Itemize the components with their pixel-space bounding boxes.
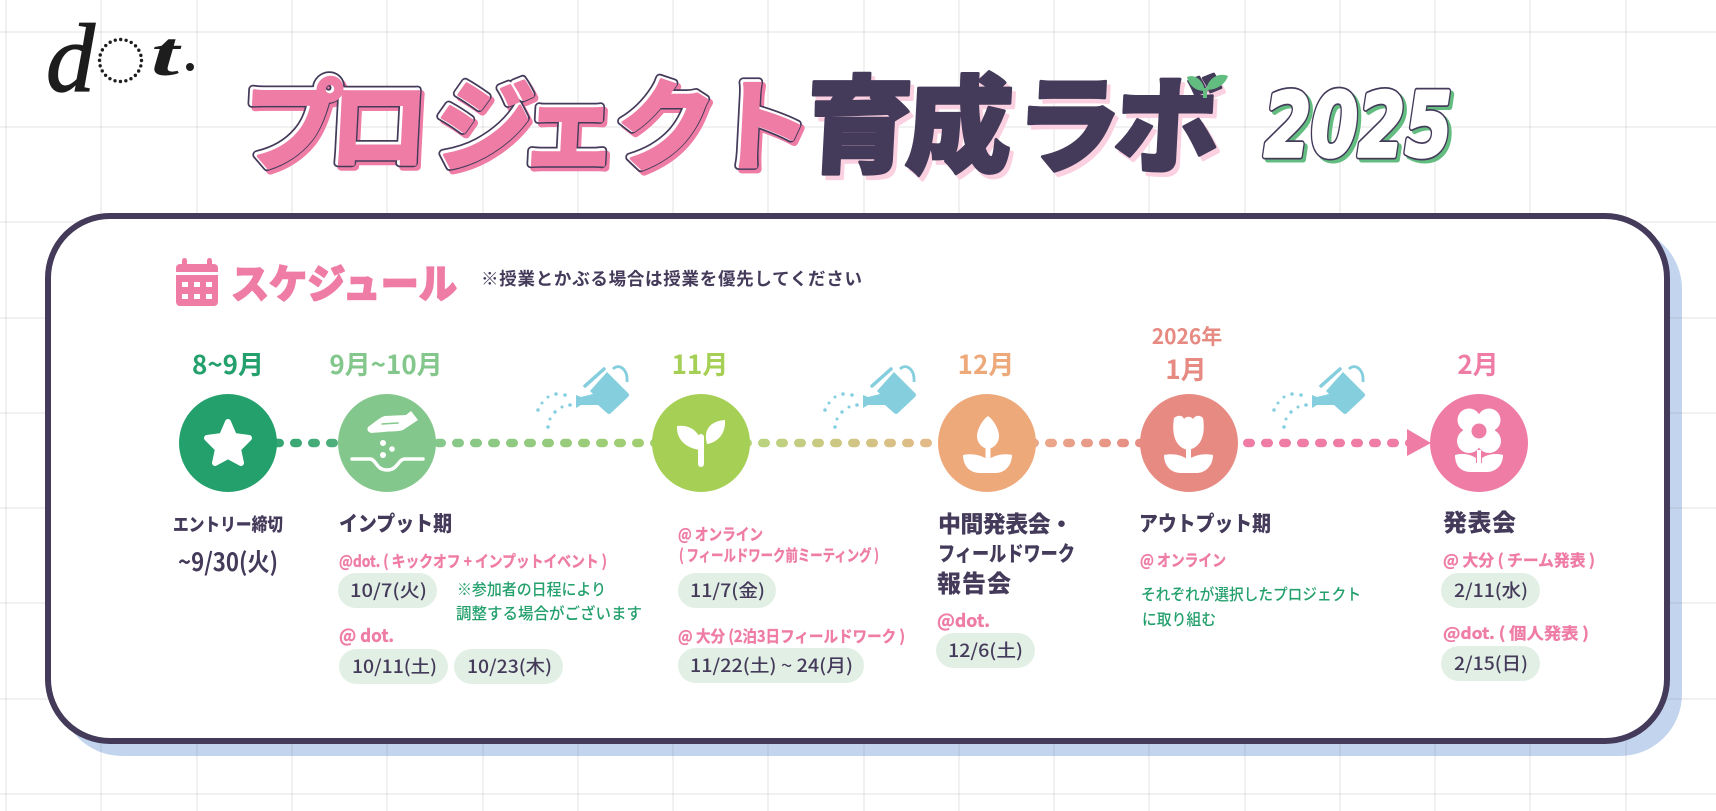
icon: star — [179, 394, 277, 492]
milestone: 2026年 1月 output period: 1月 — [1165, 350, 1207, 387]
milestone: 2026年 1月 output period: それぞれが選択したプロジェクト — [1141, 581, 1361, 605]
title: プロジェクト: プロジェクト — [237, 45, 815, 190]
date pill: 10/7(火) — [350, 577, 427, 603]
milestone: 12月 mid presentation: 中間発表会・ — [938, 505, 1073, 539]
milestone: 2月 final presentation — [1430, 345, 1595, 681]
date pill — [1441, 646, 1540, 681]
date pill: 2/11(水) — [1454, 577, 1528, 603]
title: プロジェクト: プロジェクト — [237, 45, 815, 190]
note: class priority: ※授業とかぶる場合は授業を優先してください — [481, 266, 862, 291]
date pill — [936, 633, 1035, 668]
icon: sprout — [652, 394, 750, 492]
icon: hand and seeds — [338, 394, 436, 492]
icon: calendar — [176, 258, 218, 306]
milestone: 2026年 1月 output period: に取り組む — [1142, 606, 1216, 630]
title: 育成ラボ: 育成ラボ — [803, 41, 1225, 195]
icon: tulip — [1140, 394, 1238, 492]
milestone: 11月: ( フィールドワーク前ミーティング ) — [679, 542, 879, 566]
milestone: 2026年 1月 output period — [1139, 321, 1361, 630]
date pill: 10/11(土) — [352, 653, 437, 679]
heading: schedule: スケジュール — [231, 252, 457, 310]
timeline arrow head — [1407, 429, 1431, 456]
milestone: 2026年 1月 output period: @ オンライン — [1140, 547, 1226, 571]
milestone: 12月 mid presentation: フィールドワーク — [938, 538, 1075, 568]
milestone: 11月: @ 大分 (2泊3日フィールドワーク ) — [678, 623, 905, 647]
date pill — [1441, 573, 1540, 608]
date pill: 11/7(金) — [690, 577, 765, 603]
milestone: 11月: @ オンライン — [678, 521, 763, 545]
title year 2025: 2025 — [1264, 74, 1452, 177]
icon: title sprout — [1187, 75, 1228, 98]
date pill — [454, 649, 563, 684]
milestone: 9月~10月 input period: @ dot. — [339, 622, 394, 648]
milestone: 12月 mid presentation: @dot. — [937, 607, 990, 633]
milestone: 8~9月 entry deadline: エントリー締切 — [173, 511, 283, 537]
note: schedule may change: ※参加者の日程により — [457, 576, 606, 600]
title year 2025: 2025 — [1264, 74, 1452, 177]
date pill — [678, 573, 776, 608]
title — [237, 41, 1229, 199]
note: schedule may change — [456, 576, 642, 624]
milestone: 2026年 1月 output period: アウトプット期 — [1139, 508, 1271, 538]
timeline: dotted line — [276, 439, 1412, 447]
milestone: 2月 final presentation: 発表会 — [1443, 503, 1516, 538]
milestone: 8~9月 entry deadline: ~9/30(火) — [178, 543, 278, 579]
milestone: 9月~10月 input period: @dot. ( キックオフ + インプットイベント ) — [339, 548, 607, 572]
milestone: 11月 — [652, 345, 905, 683]
date pill — [678, 648, 864, 683]
note: schedule may change: 調整する場合がございます — [456, 600, 642, 624]
date pill — [339, 649, 448, 684]
date pill: 11/22(土) ~ 24(月) — [690, 652, 853, 678]
milestone: 9月~10月 input period: 9月~10月 — [329, 345, 443, 382]
icon: flower — [1430, 394, 1528, 492]
milestone: 2月 final presentation: @dot. ( 個人発表 ) — [1443, 620, 1589, 644]
milestone: 8~9月 entry deadline — [173, 345, 283, 579]
card shadow — [60, 227, 1682, 756]
watering can 3 — [1272, 367, 1365, 429]
milestone: 11月: 11月 — [672, 345, 728, 382]
milestone: 12月 mid presentation: 12月 — [958, 345, 1014, 382]
title: プロジェクト: プロジェクト — [240, 49, 818, 194]
date pill — [338, 573, 437, 608]
watering can 2 — [823, 367, 916, 429]
milestone: 8~9月 entry deadline: 8~9月 — [192, 345, 264, 382]
date pill: 2/15(日) — [1454, 650, 1528, 676]
milestone: 2026年 1月 output period: 2026年 — [1152, 321, 1222, 351]
panel: schedule card — [48, 216, 1667, 741]
milestone: 9月~10月 input period — [329, 345, 642, 684]
icon: budding plant — [938, 394, 1036, 492]
title: 育成ラボ: 育成ラボ — [807, 46, 1229, 199]
date pill: 12/6(土) — [948, 637, 1023, 663]
date pill: 10/23(木) — [467, 653, 552, 679]
logo: dot.: d — [46, 5, 96, 113]
milestone: 2月 final presentation: @ 大分 ( チーム発表 ) — [1443, 547, 1595, 571]
logo: dot. — [46, 5, 194, 113]
milestone: 12月 mid presentation: 報告会 — [937, 564, 1011, 599]
milestone: 9月~10月 input period: インプット期 — [339, 508, 452, 538]
title year 2025: 2025 — [1267, 77, 1455, 180]
logo: dot.: t — [151, 18, 182, 89]
watering can 1 — [536, 367, 629, 429]
milestone: 12月 mid presentation — [936, 345, 1075, 668]
milestone: 2月 final presentation: 2月 — [1457, 345, 1499, 382]
title: プロジェクト: プロジェクト — [238, 47, 816, 191]
